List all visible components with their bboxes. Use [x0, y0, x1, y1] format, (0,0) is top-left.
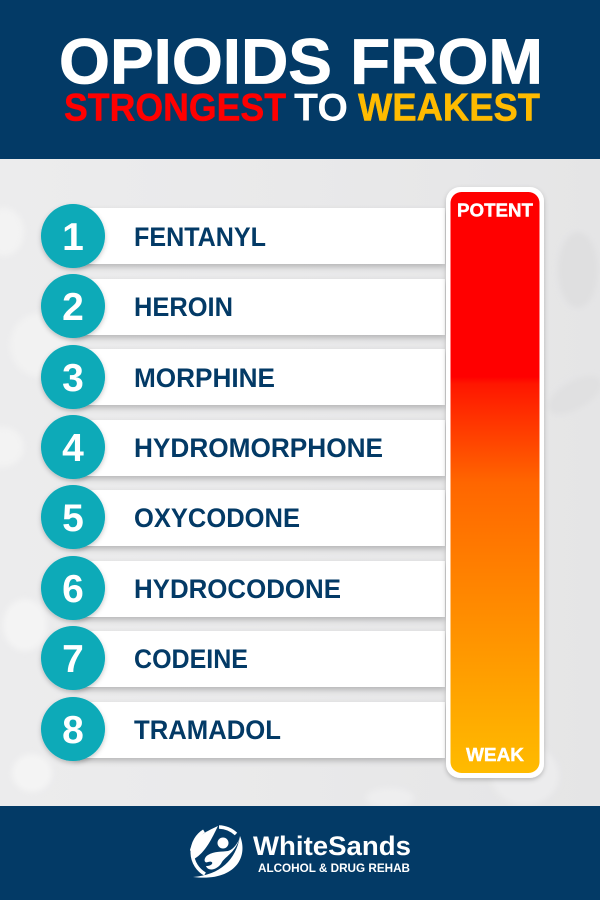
title line 2: STRONGEST: [64, 86, 286, 130]
row 3: morphine: [41, 345, 445, 409]
row 4: hydromorphone: HYDROMORPHONE: [134, 433, 383, 463]
row 1: fentanyl: FENTANYL: [134, 222, 266, 252]
row 1: fentanyl: [41, 204, 445, 268]
row 3: morphine: 3: [62, 357, 84, 400]
row 8: tramadol: [41, 697, 445, 761]
row 5: oxycodone: [41, 485, 445, 549]
potency gradient bar: [446, 187, 544, 778]
row 5: oxycodone: 5: [62, 497, 84, 540]
row 4: hydromorphone: 4: [62, 427, 84, 470]
row 6: hydrocodone: 6: [62, 568, 84, 611]
background: pills photo: [0, 159, 600, 808]
title line 2: WEAKEST: [358, 86, 540, 130]
row 6: hydrocodone: [41, 556, 445, 620]
row 7: codeine: [41, 626, 445, 690]
title line 1: OPIOIDS FROM: [59, 26, 543, 98]
row 8: tramadol: TRAMADOL: [134, 715, 281, 745]
row 7: codeine: 7: [62, 638, 84, 681]
row 5: oxycodone: OXYCODONE: [134, 503, 300, 533]
row 2: heroin: [41, 274, 445, 338]
row 7: codeine: CODEINE: [134, 644, 248, 674]
row 4: hydromorphone: [41, 415, 445, 479]
list of opioids: [41, 204, 445, 761]
row 3: morphine: MORPHINE: [134, 363, 275, 393]
logo wordmark: WhiteSands: [253, 831, 411, 861]
label: potent: POTENT: [457, 200, 533, 220]
row 2: heroin: HEROIN: [134, 292, 233, 322]
title line 2: TO: [294, 86, 348, 130]
footer band: [0, 806, 600, 900]
icon: whitesands logo: [190, 826, 243, 878]
row 6: hydrocodone: HYDROCODONE: [134, 574, 341, 604]
row 1: fentanyl: 1: [62, 216, 84, 259]
title line 2: [64, 86, 540, 130]
logo tagline: ALCOHOL & DRUG REHAB: [258, 863, 410, 875]
row 2: heroin: 2: [62, 286, 84, 329]
label: weak: WEAK: [466, 745, 524, 765]
row 8: tramadol: 8: [62, 709, 84, 752]
header band: [0, 0, 600, 159]
